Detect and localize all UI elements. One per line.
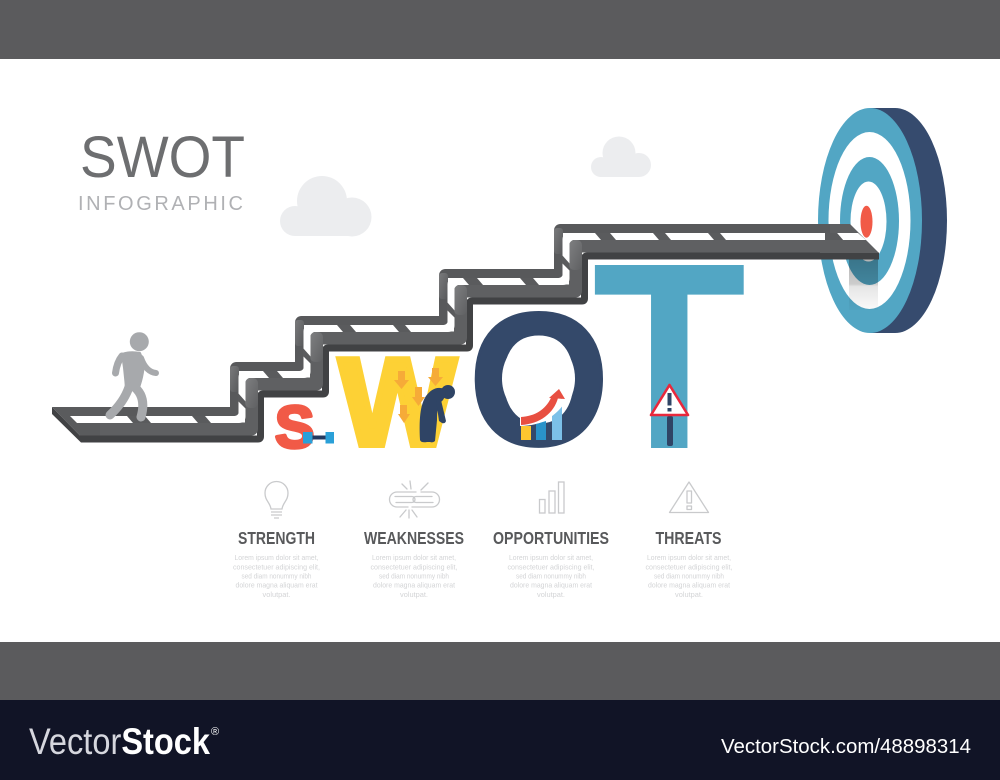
column: threats: Lorem ipsum dolor sit amet, <box>647 553 731 562</box>
column: opportunities: dolore magna aliquam erat <box>510 580 593 590</box>
letter W: W <box>339 334 456 472</box>
column: threats: dolore magna aliquam erat <box>648 580 731 590</box>
column: threats: volutpat. <box>675 590 703 599</box>
icon: dumbbell <box>303 432 334 444</box>
column: threats: consectetuer adipiscing elit, <box>646 562 732 572</box>
column: strength: sed diam nonummy nibh <box>242 572 312 580</box>
road dark edge <box>52 256 879 442</box>
icon: small cloud <box>591 136 651 177</box>
icon: broken chain <box>390 481 440 518</box>
lane breaks <box>127 233 843 423</box>
column: opportunities: consectetuer adipiscing elit, <box>508 562 594 572</box>
icon: bars <box>540 482 564 513</box>
bottom grey band <box>0 642 1000 700</box>
column: strength: consectetuer adipiscing elit, <box>233 562 320 572</box>
column: strength: volutpat. <box>262 590 290 599</box>
title: SWOT <box>80 125 245 190</box>
column: opportunities: sed diam nonummy nibh <box>516 572 586 580</box>
footer logo: ® <box>211 726 219 738</box>
road surface <box>52 224 879 436</box>
column: weaknesses <box>364 528 464 599</box>
column: opportunities: Lorem ipsum dolor sit amet, <box>509 553 593 562</box>
footer logo: VectorStock <box>29 721 210 762</box>
letter T: T <box>592 207 746 504</box>
icon: large cloud <box>280 176 372 236</box>
icon: light bulb <box>265 482 288 518</box>
road <box>52 224 879 442</box>
top band <box>0 0 1000 59</box>
icon: growth chart <box>520 389 567 440</box>
icon: warning outline <box>670 482 708 512</box>
column: weaknesses: WEAKNESSES <box>364 528 464 548</box>
title <box>78 125 245 215</box>
icon: tired person <box>420 385 455 442</box>
column: weaknesses: Lorem ipsum dolor sit amet, <box>372 553 456 562</box>
letter S: S <box>275 394 314 460</box>
column: opportunities: volutpat. <box>537 590 565 599</box>
road lane <box>70 233 866 423</box>
letter O: O <box>469 275 609 485</box>
column: strength: dolore magna aliquam erat <box>236 580 318 590</box>
column: opportunities: OPPORTUNITIES <box>493 528 609 548</box>
target <box>818 108 947 333</box>
column: weaknesses: sed diam nonummy nibh <box>379 572 449 580</box>
column: weaknesses: volutpat. <box>400 590 428 599</box>
icon: falling arrows <box>394 368 443 423</box>
column: opportunities <box>493 528 609 599</box>
column: threats: sed diam nonummy nibh <box>654 572 724 580</box>
title: INFOGRAPHIC <box>78 193 243 215</box>
column: strength <box>233 528 320 599</box>
column: strength: STRENGTH <box>238 528 315 548</box>
column: weaknesses: dolore magna aliquam erat <box>373 580 456 590</box>
column: weaknesses: consectetuer adipiscing elit, <box>370 562 458 572</box>
road corner highlights <box>230 228 582 408</box>
column: threats <box>646 528 732 599</box>
column: threats: THREATS <box>656 528 722 548</box>
icon: warning sign <box>651 385 688 446</box>
footer band <box>0 700 1000 780</box>
footer url: VectorStock.com/48898314 <box>721 736 971 758</box>
icon: walking person <box>110 332 156 417</box>
column: strength: Lorem ipsum dolor sit amet, <box>234 553 318 562</box>
